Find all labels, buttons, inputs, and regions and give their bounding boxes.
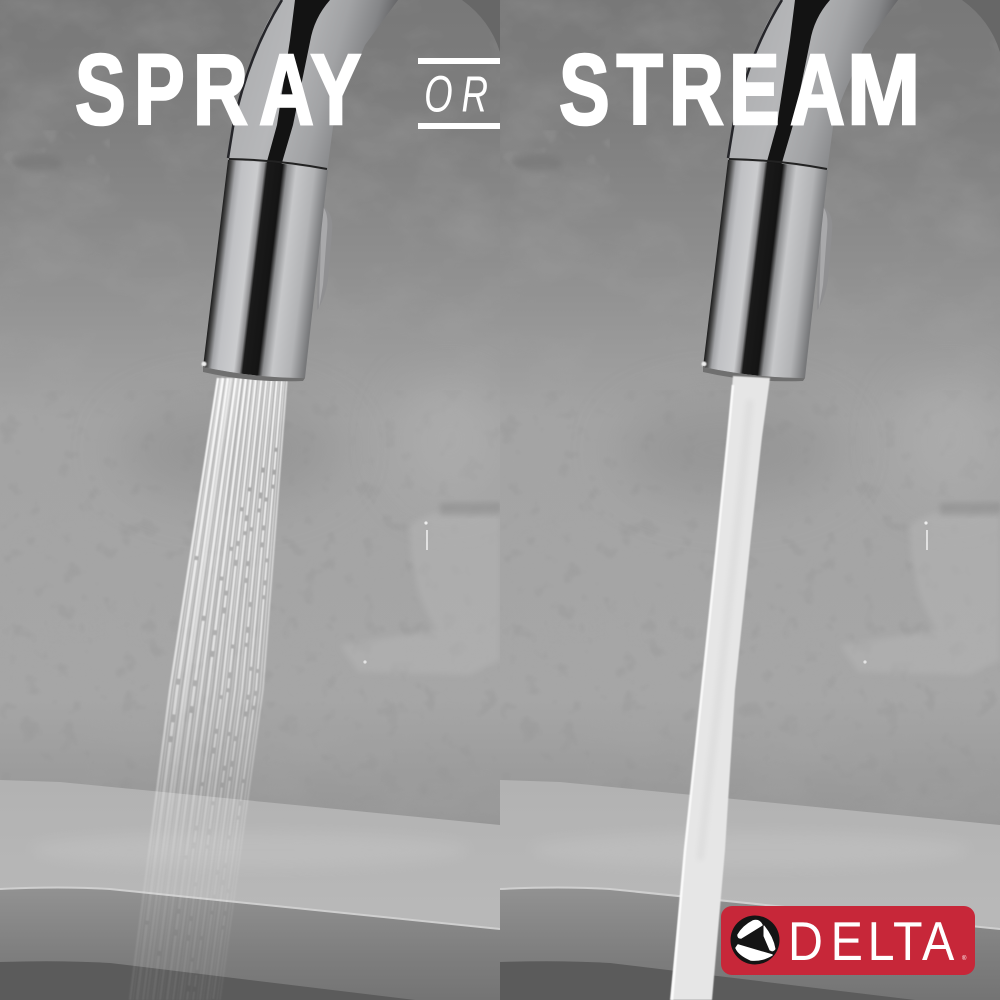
title word: STREAM: STREA bbox=[559, 34, 845, 145]
title connector: OR between rules bbox=[418, 58, 500, 129]
faucet: spray panel bbox=[202, 0, 398, 381]
water: solid stream bbox=[670, 376, 770, 1000]
title connector: OR between rules: OR bbox=[424, 67, 488, 123]
panel: spray photo background bbox=[0, 0, 500, 1000]
faucet: stream panel bbox=[702, 0, 898, 381]
logo: Delta badge: DELTA bbox=[788, 910, 955, 972]
title word: SPRAY: SPRAY bbox=[75, 34, 361, 145]
logo: Delta badge bbox=[721, 906, 975, 975]
logo: Delta badge: ® bbox=[962, 955, 967, 962]
icon: Delta triangle mark bbox=[730, 916, 780, 964]
title word: STREAM: M bbox=[847, 34, 920, 145]
water: spray strands bbox=[130, 378, 287, 1000]
panel: stream photo background bbox=[500, 0, 1000, 1000]
